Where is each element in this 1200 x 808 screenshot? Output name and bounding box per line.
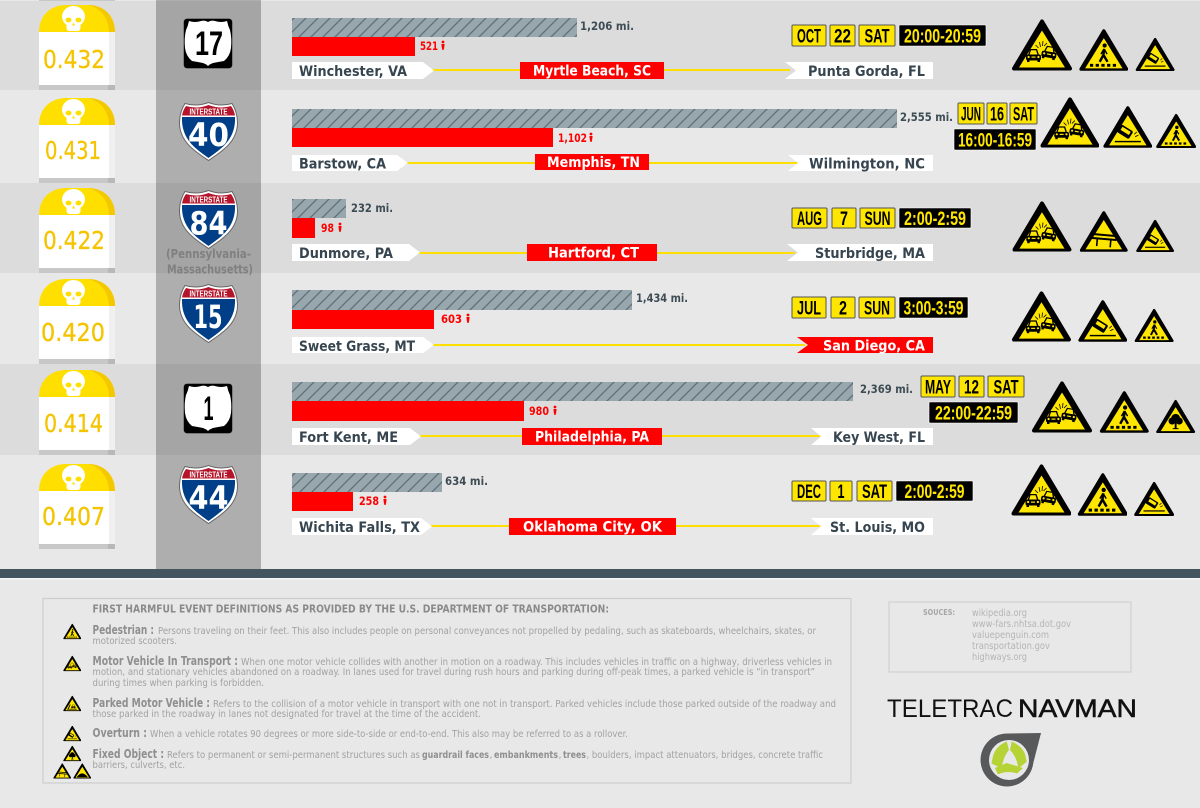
total miles bar [292,109,953,128]
route [292,154,933,172]
definition: fixed object: Refers to permanent or semi-permanent structures such as [167,750,420,761]
date chips [954,103,1037,152]
definition: parked motor vehicle [92,695,836,720]
date chips [792,25,986,48]
date chips: SAT [994,376,1019,398]
date chips [792,481,973,503]
date chips: 22:00-22:59 [935,402,1012,424]
date chips: JUL [797,298,821,320]
hazard icons [1034,384,1194,432]
date chips: 16 [990,104,1004,126]
route: Oklahoma City, OK [523,520,663,536]
row 5: US 1 [39,370,1194,455]
date chips: 2:00-2:59 [904,481,965,503]
fatalities bar [292,128,593,147]
date chips: 2 [839,298,847,320]
total miles bar: 1,206 mi. [580,19,634,33]
total miles bar [292,290,688,310]
definition: fixed object: barriers, culverts, etc. [92,760,185,771]
route: Myrtle Beach, SC [533,64,651,80]
route: Fort Kent, ME [299,430,398,446]
fatalities bar [292,310,470,329]
fatalities bar: 258 [359,494,379,508]
icons: fixed object [54,746,91,778]
shield: Interstate 84: 84 [190,204,228,242]
definition: fixed object: trees [563,750,586,761]
fatalities bar: 98 [321,221,334,235]
fatalities bar [292,401,557,421]
route [292,428,933,446]
highway note [166,247,253,276]
panel: sources: transportation.gov [972,641,1050,652]
definition: fixed object: , [490,750,493,761]
shield: Interstate 84 [179,190,238,248]
route [292,518,933,536]
route: Philadelphia, PA [535,430,649,446]
definition: parked motor vehicle: Parked Motor Vehicle : [92,695,210,710]
total miles bar: 1,434 mi. [636,291,688,305]
shield: US 1: 1 [204,390,214,428]
fatalities bar [292,37,445,56]
row 3: I-84 [39,188,1173,276]
panel: definitions [43,598,851,783]
date chips [921,376,1024,424]
route: Wichita Falls, TX [299,520,420,536]
hazard icons [1014,293,1172,341]
icon: motor vehicle in transport [64,656,81,671]
panel: sources: valuepenguin.com [972,630,1049,641]
fatalities bar: 1,102 [558,131,587,145]
date chips: AUG [797,208,822,230]
logo mark [980,733,1041,787]
route: Wilmington, NC [809,156,925,172]
definition: fixed object: guardrail faces [422,750,489,761]
route: Barstow, CA [299,156,386,172]
tombstone score 0.420 [39,279,115,364]
definition: pedestrian: Persons traveling on their feet. This also includes people on personal conveyances not propelled by pedaling, such as skateboards, wheelchairs, skates, or [158,626,816,637]
definition: pedestrian: Pedestrian : [92,622,154,637]
definition: motor vehicle in transport: Motor Vehicle In Transport : [92,653,238,668]
definition: overturn [92,725,628,740]
tombstone score 0.414: 0.414 [44,409,103,438]
date chips [792,297,968,320]
logo wordmark: TELETRAC [887,695,1013,723]
shield: Interstate 15 [179,284,238,342]
definition: parked motor vehicle: Refers to the collision of a motor vehicle in transport with one not in transport. Parked vehicles include those parked outside of the roadway and [213,699,836,710]
total miles bar: 2,555 mi. [900,110,953,124]
hazard icons [1014,203,1173,251]
shield: Interstate 44 [179,466,238,524]
shield: Interstate 44: 44 [188,479,228,517]
fatalities bar [292,218,342,238]
date chips: 2:00-2:59 [904,208,966,230]
hazard icons [1014,466,1173,515]
tombstone score 0.431 [39,98,115,183]
shield: Interstate 40: 40 [188,116,229,154]
date chips: DEC [797,481,821,503]
total miles bar [292,18,634,37]
shield: Interstate 84: INTERSTATE [190,196,228,204]
definition: fixed object [92,746,823,771]
definition: motor vehicle in transport: during times when parking is forbidden. [92,678,264,689]
date chips: 22 [834,26,851,48]
shield: Interstate 40 [179,102,238,160]
fatalities bar: 603 [441,312,462,326]
total miles bar: 634 mi. [445,474,488,488]
tombstone score 0.407: 0.407 [42,502,105,531]
tombstone score 0.407 [39,464,115,549]
highway note: (Pennsylvania- [166,247,251,261]
date chips: MAY [925,376,951,398]
shield: Interstate 44: INTERSTATE [190,470,228,480]
logo wordmark [887,695,1137,723]
tombstone score 0.422 [39,188,115,273]
row 1: US 17 [39,5,1173,90]
tombstone score 0.432: 0.432 [43,45,105,74]
date chips: SUN [864,298,890,320]
route: Memphis, TN [547,155,640,171]
tombstone score 0.422: 0.422 [43,226,105,255]
hazard icons [1042,99,1195,147]
definition: overturn: When a vehicle rotates 90 degrees or more side-to-side or end-to-end. This also may be referred to as a rollover. [150,729,628,740]
tombstone score 0.431: 0.431 [45,136,101,165]
shield: Interstate 40: INTERSTATE [190,108,228,116]
definition: motor vehicle in transport [92,653,832,689]
route: St. Louis, MO [830,520,925,536]
highway note: Massachusetts) [167,262,253,276]
definition: fixed object: embankments [494,750,558,761]
fatalities bar: 521 [420,39,438,53]
definition: fixed object: Fixed Object : [92,746,164,761]
total miles bar: 232 mi. [351,201,393,215]
route [292,244,933,262]
panel: sources [889,602,1131,672]
route: San Diego, CA [823,338,925,354]
date chips: SUN [864,208,890,230]
shield: US 17: 17 [195,25,223,63]
date chips: JUN [961,104,981,126]
row 6: I-44 [39,464,1173,549]
tombstone score 0.420: 0.420 [41,318,105,347]
route: Winchester, VA [299,64,407,80]
definition: overturn: Overturn : [92,725,147,740]
definition: motor vehicle in transport: motion, and stationary vehicles abandoned on a roadway. In lanes used for travel during rush hours and parking during off-peak times, a parked vehicle is “in transport” [92,667,815,678]
date chips: SAT [1013,104,1034,126]
route: Hartford, CT [548,246,639,262]
row 4: I-15 [39,279,1172,364]
panel: sources: highways.org [972,652,1027,663]
shield: Interstate 15: INTERSTATE [190,290,228,298]
tombstone score 0.432 [39,5,115,90]
tombstone score 0.414 [39,370,115,455]
date chips: 20:00-20:59 [904,26,981,48]
date chips: 12 [964,376,979,398]
panel: sources: SOUCES: [923,608,955,617]
date chips: SAT [864,26,890,48]
route: Sweet Grass, MT [299,339,415,355]
shield: US 1 [184,384,232,434]
date chips [792,208,971,230]
panel: sources: www-fars.nhtsa.dot.gov [972,619,1071,630]
shield: US 17 [184,18,232,68]
definition: fixed object: , [558,750,562,761]
date chips: OCT [797,26,821,48]
icon: parked motor vehicle [64,696,81,711]
route: Key West, FL [833,430,925,446]
route [292,337,933,355]
date chips: SAT [862,481,887,503]
date chips: 7 [840,208,848,230]
icon: overturn [64,726,81,741]
hazard icons [1014,22,1173,70]
panel: sources: wikipedia.org [972,608,1027,619]
total miles bar: 2,369 mi. [860,382,913,396]
route: Sturbridge, MA [815,246,925,262]
definition: fixed object: , boulders, impact attenuators, bridges, concrete traffic [586,750,823,761]
fatalities bar: 980 [529,404,549,418]
date chips: 1 [838,481,845,503]
logo wordmark: NAVMAN [1018,695,1137,723]
date chips: 16:00-16:59 [958,130,1032,152]
shield: Interstate 15: 15 [194,298,222,336]
total miles bar [292,473,488,492]
date chips: 3:00-3:59 [904,298,964,320]
route [292,62,933,80]
definitions heading: FIRST HARMFUL EVENT DEFINITIONS AS PROVIDED BY THE U.S. DEPARTMENT OF TRANSPORTATION: [92,604,609,616]
fatalities bar [292,492,387,511]
route: Dunmore, PA [299,246,393,262]
definition: pedestrian: motorized scooters. [92,636,177,647]
route: Punta Gorda, FL [808,64,925,80]
row 2: I-40 [39,98,1195,183]
definition: motor vehicle in transport: When one motor vehicle collides with another in motion on a roadway. This includes vehicles in traffic on a highway, driverless vehicles in [241,657,832,668]
definition: parked motor vehicle: those parked in the roadway in lanes not designated for travel at the time of the accident. [92,709,481,720]
icon: pedestrian [64,624,81,639]
total miles bar [292,199,393,218]
total miles bar [292,382,913,401]
definition: pedestrian [92,622,816,647]
